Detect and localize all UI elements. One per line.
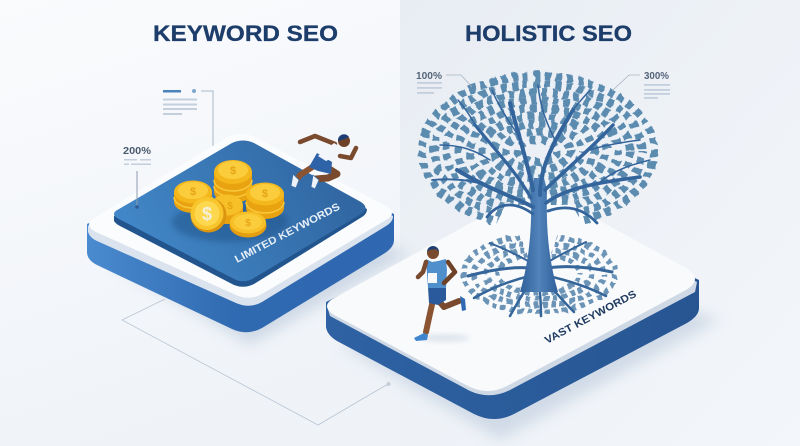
coin stack: top: $ <box>230 165 236 177</box>
callout: 200%: 200% <box>123 146 151 157</box>
callout: text lines with connector above left platform <box>163 89 213 155</box>
arms <box>418 262 426 277</box>
back leg <box>438 300 459 307</box>
callout: 200% <box>123 146 151 165</box>
race bib <box>428 273 437 283</box>
connector lines at bottom left <box>122 299 390 425</box>
coin stack: right: $ <box>262 188 268 200</box>
back shoe <box>460 296 466 311</box>
platform top: right <box>327 192 695 391</box>
trunk <box>520 178 558 292</box>
head <box>427 247 439 259</box>
vest <box>318 143 342 161</box>
vest <box>426 259 447 288</box>
runner: right jogger <box>414 246 470 342</box>
tree roots <box>463 236 615 316</box>
leaves <box>422 76 654 226</box>
platform edge: right <box>327 200 697 395</box>
coin stack: centre: $ <box>227 201 233 212</box>
coin: front: $ <box>245 218 251 229</box>
front leg <box>316 167 337 179</box>
shoes <box>291 174 299 188</box>
platform: right (holistic SEO) <box>326 192 720 440</box>
platform slab top: left <box>89 134 392 298</box>
label: vast keywords: VAST KEYWORDS <box>543 288 638 347</box>
callout: 100%: 100% <box>416 71 442 82</box>
coin stack: left: $ <box>190 186 196 198</box>
callout: 100% <box>416 71 472 94</box>
shorts <box>428 287 446 305</box>
shorts <box>309 153 332 174</box>
blue plate: top <box>114 140 366 281</box>
coins <box>172 160 288 242</box>
root leaves <box>463 236 615 312</box>
label: limited keywords: LIMITED KEYWORDS <box>233 201 342 266</box>
runner: left sprinter <box>291 134 356 189</box>
root branches <box>468 242 612 316</box>
back arm <box>300 136 335 144</box>
front shoe <box>414 333 428 341</box>
front leg <box>426 300 433 332</box>
front arm <box>340 148 356 158</box>
head <box>338 135 350 147</box>
callout: 300%: 300% <box>644 71 669 82</box>
title: Keyword SEO: KEYWORD SEO <box>153 21 338 46</box>
back leg <box>296 166 314 181</box>
title: Holistic SEO: HOLISTIC SEO <box>465 21 632 46</box>
leader line to plate <box>136 171 138 207</box>
background: right panel <box>400 0 800 446</box>
platform base: left <box>87 150 394 332</box>
blue plate: edge <box>114 150 367 287</box>
tree canopy <box>422 76 654 292</box>
platform slab edge: left <box>88 140 393 306</box>
platform: left (keyword SEO) <box>87 134 410 345</box>
branches <box>432 85 650 223</box>
coin: upright: $ <box>202 204 212 224</box>
callout: 300% <box>612 71 670 99</box>
background: left panel <box>0 0 400 446</box>
platform base: right <box>326 200 699 419</box>
